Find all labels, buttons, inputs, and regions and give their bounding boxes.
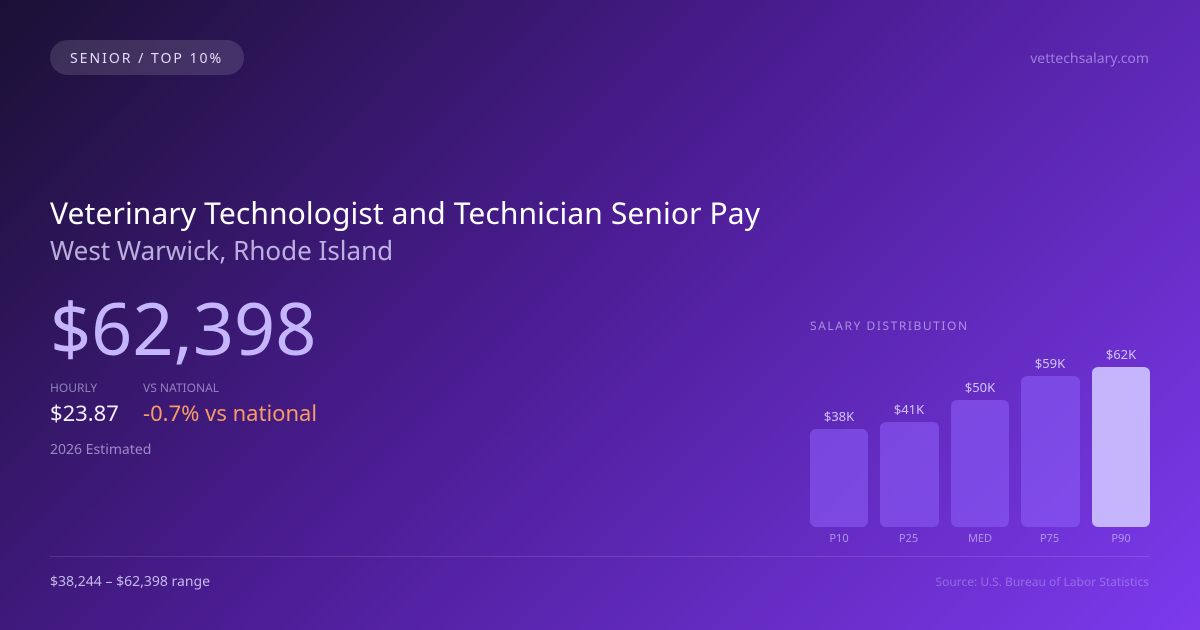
stat: hourly: HOURLY xyxy=(50,379,97,396)
chart: salary distribution: P75 xyxy=(1040,531,1059,546)
badge: senior / top 10% xyxy=(50,40,244,75)
year note: 2026 Estimated xyxy=(50,440,151,459)
bar P25 xyxy=(880,422,939,527)
stat: vs national: VS NATIONAL xyxy=(143,379,219,396)
stat: vs national xyxy=(143,379,317,428)
chart: salary distribution: $62K xyxy=(1106,345,1136,363)
bar median xyxy=(951,400,1009,527)
chart: salary distribution: $59K xyxy=(1035,354,1065,372)
site name: vettechsalary.com xyxy=(1030,49,1149,68)
bar P10 xyxy=(810,429,868,527)
chart: salary distribution: P10 xyxy=(829,531,849,546)
bar P90 xyxy=(1092,367,1150,527)
source: Source: U.S. Bureau of Labor Statistics xyxy=(936,573,1149,590)
subtitle: location: West Warwick, Rhode Island xyxy=(50,232,393,268)
chart: salary distribution: P90 xyxy=(1111,531,1131,546)
chart: salary distribution: $50K xyxy=(965,378,995,396)
stat: hourly xyxy=(50,379,119,428)
chart: salary distribution: P25 xyxy=(899,531,918,546)
salary range: $38,244 – $62,398 range xyxy=(50,572,210,591)
footer divider xyxy=(50,556,1150,557)
chart: salary distribution: $41K xyxy=(894,400,924,418)
title: Veterinary Technologist and Technician Senior Pay xyxy=(50,192,760,233)
stat: vs national: -0.7% vs national xyxy=(143,398,317,428)
badge: senior / top 10%: SENIOR / TOP 10% xyxy=(70,49,223,68)
chart heading: SALARY DISTRIBUTION xyxy=(810,317,969,334)
bar P75 xyxy=(1021,376,1080,527)
chart: salary distribution: $38K xyxy=(824,407,854,425)
chart: salary distribution: MED xyxy=(968,531,992,546)
stat: hourly: $23.87 xyxy=(50,398,119,428)
chart: salary distribution xyxy=(810,317,1150,546)
annual salary figure: $62,398 xyxy=(50,279,316,377)
